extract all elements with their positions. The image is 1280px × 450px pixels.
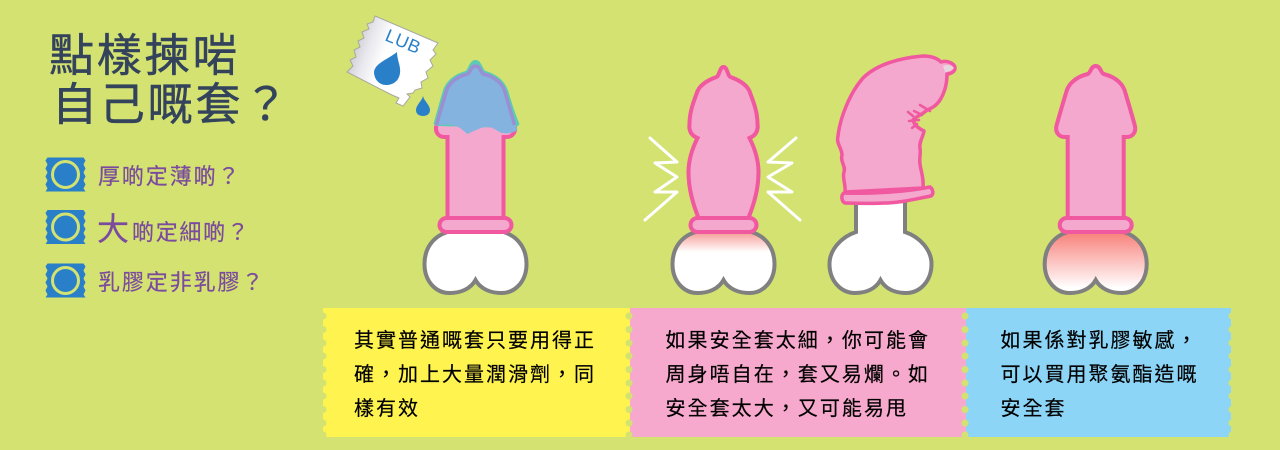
text: latex or non-latex: 乳膠定非乳膠？: [98, 270, 265, 295]
figure 1: condom with lubricant: [424, 60, 526, 293]
condom ring: [690, 218, 756, 232]
text: latex allergy advice: [1000, 329, 1198, 420]
icon: lubricant sachet: [347, 16, 438, 106]
icon: condom packet 2: [46, 210, 86, 244]
icon: small drop: [416, 96, 430, 116]
icon: left pressure zigzag: [645, 138, 677, 220]
condom outline under lubricant: [436, 66, 514, 125]
list: question options: [46, 158, 265, 298]
text: proper use and lube: 其實普通嘅套只要用得正: [354, 329, 596, 352]
testicles with redness: [1045, 232, 1147, 293]
tight condom body: [688, 67, 758, 218]
title: 點樣揀啱: [49, 30, 240, 81]
text: big or small: [97, 211, 251, 247]
lubricant halo: [434, 60, 520, 128]
panel: pink note: [630, 308, 966, 437]
label: LUB: LUB: [382, 25, 424, 58]
icon: right pressure zigzag: [768, 138, 800, 220]
condom body: [436, 66, 515, 218]
panel: yellow note: [323, 308, 630, 437]
text: sizing advice: 周身唔自在，套又易爛。如: [666, 363, 930, 386]
text: latex allergy advice: 安全套: [1000, 397, 1066, 420]
figure 3: condom too big: [830, 56, 955, 293]
testicles: [424, 232, 526, 293]
loose condom body: [838, 56, 955, 192]
text: latex allergy advice: 可以買用聚氨酯造嘅: [1000, 363, 1198, 386]
condom ring: [1060, 218, 1132, 232]
title: [49, 30, 291, 130]
lubricant coating: [434, 66, 518, 134]
figure 2: condom too tight: [672, 67, 774, 293]
text: latex allergy advice: 如果係對乳膠敏感，: [1000, 329, 1198, 352]
testicles with redness: [672, 232, 774, 293]
figure 4: latex allergy: [1045, 66, 1147, 293]
condom body: [1056, 66, 1135, 218]
text: sizing advice: 安全套太大，又可能易甩: [666, 397, 908, 420]
text: proper use and lube: 確，加上大量潤滑劑，同: [354, 363, 596, 386]
text: proper use and lube: [354, 329, 596, 420]
text: big or small: 啲定細啲？: [132, 220, 251, 245]
icon: large drop: [374, 52, 400, 85]
title: 自己嘅套？: [52, 79, 291, 130]
condom ring: [440, 218, 512, 232]
text: sizing advice: [666, 329, 930, 420]
panel: blue note: [966, 308, 1231, 437]
icon: condom packet 1: [46, 158, 86, 192]
condom tip: [943, 65, 954, 72]
text: thick or thin: 厚啲定薄啲？: [98, 164, 241, 189]
penis and testicles: [830, 200, 932, 293]
text: big or small: 大: [97, 211, 129, 247]
icon: condom packet 3: [46, 264, 86, 298]
text: sizing advice: 如果安全套太細，你可能會: [666, 329, 930, 352]
text: proper use and lube: 樣有效: [354, 397, 420, 420]
loose condom ring: [842, 187, 933, 203]
condom tear stitches: [908, 105, 930, 128]
